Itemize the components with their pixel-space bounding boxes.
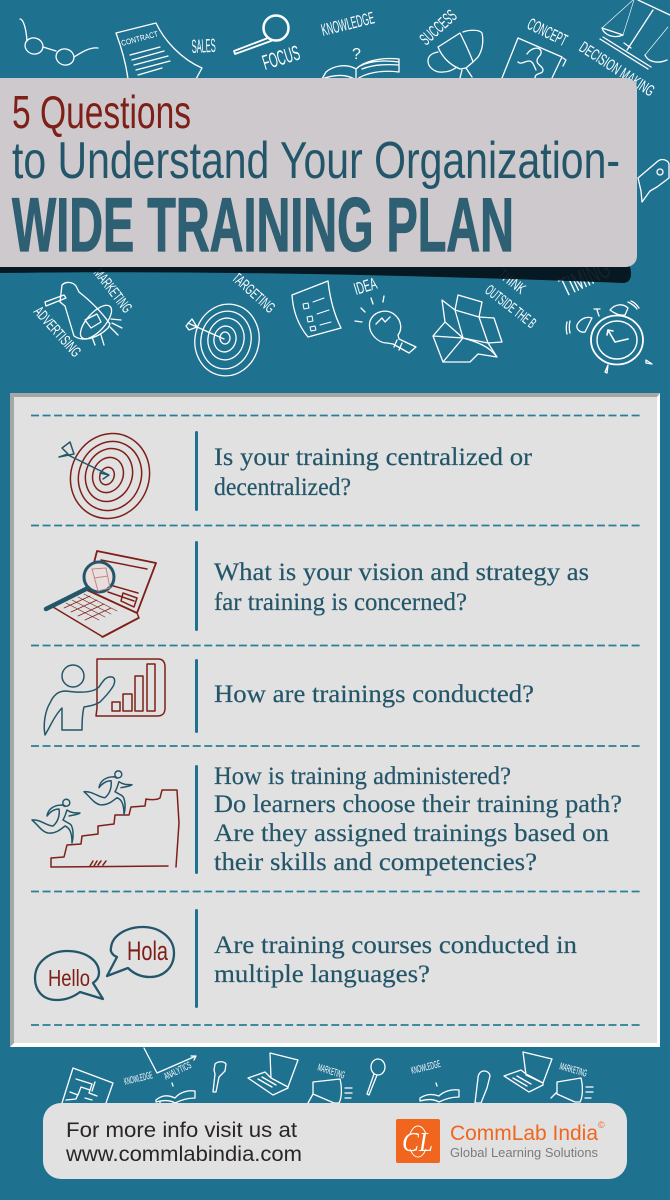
row 3 <box>44 659 534 735</box>
doodle: think outside the box label <box>482 266 539 332</box>
footer panel <box>43 1103 627 1179</box>
question 2 text <box>214 559 589 616</box>
divider <box>195 431 198 511</box>
doodle: maze <box>62 1068 113 1103</box>
divider <box>195 659 198 733</box>
doodle: marketing label: MARKETING <box>90 265 135 316</box>
doodle: timing label: TIMING <box>555 253 615 302</box>
doodle: analytics label: ANALYTICS <box>162 1060 194 1083</box>
footer text: www.commlabindia.com <box>65 1143 302 1166</box>
icon: speech bubbles <box>35 927 174 1000</box>
footer text: For more info visit us at <box>66 1119 297 1142</box>
title line: 5 Questions: 5 Questions <box>12 86 191 138</box>
header doodles <box>20 0 670 382</box>
logo: CommLab India <box>396 1119 605 1163</box>
icon: laptop and magnifier <box>46 551 156 637</box>
doodle: key <box>475 1071 490 1103</box>
header doodles: SALES <box>191 36 216 58</box>
icon: speech bubbles: Hola <box>127 936 169 966</box>
doodle: checklist <box>292 281 341 337</box>
doodle: scales <box>600 0 670 69</box>
question 2 text: far training is concerned? <box>214 589 467 616</box>
doodle: magnifier <box>367 1059 385 1095</box>
question 1 text <box>214 444 533 501</box>
row 5 <box>35 909 578 1008</box>
question 1 text: decentralized? <box>214 474 351 501</box>
divider <box>195 909 198 1008</box>
doodle: open book <box>322 46 399 80</box>
footer doodles: MARKETING <box>558 1061 588 1080</box>
question 4 text: How is training administered? <box>214 763 511 790</box>
icon: presenter with chart <box>44 659 165 735</box>
doodle: key <box>213 1062 226 1092</box>
question 1 text: Is your training centralized or <box>214 444 533 471</box>
doodle: megaphone <box>551 1078 593 1102</box>
doodle: trophy <box>428 30 483 78</box>
title banner <box>0 78 637 267</box>
doodle: concept label: CONCEPT <box>524 15 570 50</box>
footer text <box>65 1119 302 1166</box>
doodle: marketing label: MARKETING <box>316 1062 346 1082</box>
doodle: glasses <box>20 19 98 67</box>
doodle: contract: CONTRACT <box>120 29 159 48</box>
doodle: contract <box>116 23 202 79</box>
icon: speech bubbles: Hello <box>48 965 90 991</box>
row 2 <box>46 541 589 637</box>
divider <box>195 541 198 631</box>
row 1 <box>58 422 533 530</box>
doodle: open book: ? <box>352 46 361 63</box>
logo: CommLab India: © <box>598 1120 605 1130</box>
question 4 text: Are they assigned trainings based on <box>214 820 610 847</box>
logo: CommLab India: CommLab India <box>450 1122 598 1145</box>
title shadow <box>0 262 631 283</box>
icon: target <box>58 422 162 530</box>
doodle: idea label: IDEA <box>352 274 380 299</box>
doodle: think outside the box label: THINK <box>495 266 529 298</box>
row 4 <box>32 763 622 876</box>
doodle: advertising bell <box>45 282 122 345</box>
doodle: targeting label: TARGETING <box>228 269 278 317</box>
doodle: laptop <box>248 1053 298 1095</box>
question 3 text: How are trainings conducted? <box>214 681 534 708</box>
doodle: chart axis <box>144 1048 196 1073</box>
doodle: advertising label: ADVERTISING <box>30 303 84 361</box>
question 4 text <box>214 763 622 876</box>
doodle: think outside the box label: OUTSIDE THE B <box>482 282 539 332</box>
question 2 text: What is your vision and strategy as <box>214 559 589 586</box>
question 5 text <box>214 932 578 988</box>
doodle: magnifier <box>234 16 288 54</box>
logo: CommLab India: CL <box>402 1127 433 1157</box>
icon: runners on stairs <box>32 771 179 867</box>
footer doodles: KNOWLEDGE <box>410 1059 442 1077</box>
doodle: key <box>638 160 669 202</box>
divider <box>195 765 198 874</box>
footer doodles: KNOWLEDGE <box>123 1070 154 1088</box>
question 4 text: their skills and competencies? <box>214 849 537 876</box>
doodle: book <box>156 1083 195 1103</box>
panel: questions <box>10 393 660 1047</box>
doodle: open box <box>433 295 502 362</box>
question 4 text: Do learners choose their training path? <box>214 791 622 818</box>
doodle: target with arrow <box>186 298 266 382</box>
logo: CommLab India: Global Learning Solutions <box>450 1146 598 1160</box>
question 5 text: multiple languages? <box>214 961 430 988</box>
doodle: book <box>420 1083 459 1102</box>
question 5 text: Are training courses conducted in <box>214 932 578 959</box>
doodle: puzzle piece <box>502 38 566 78</box>
doodle: lightbulb <box>355 296 416 353</box>
doodle: alarm clock <box>566 301 652 373</box>
doodle: focus label: FOCUS <box>260 42 303 75</box>
doodle: megaphone <box>308 1079 352 1103</box>
doodle: laptop <box>504 1052 552 1092</box>
footer doodles <box>62 1048 593 1103</box>
